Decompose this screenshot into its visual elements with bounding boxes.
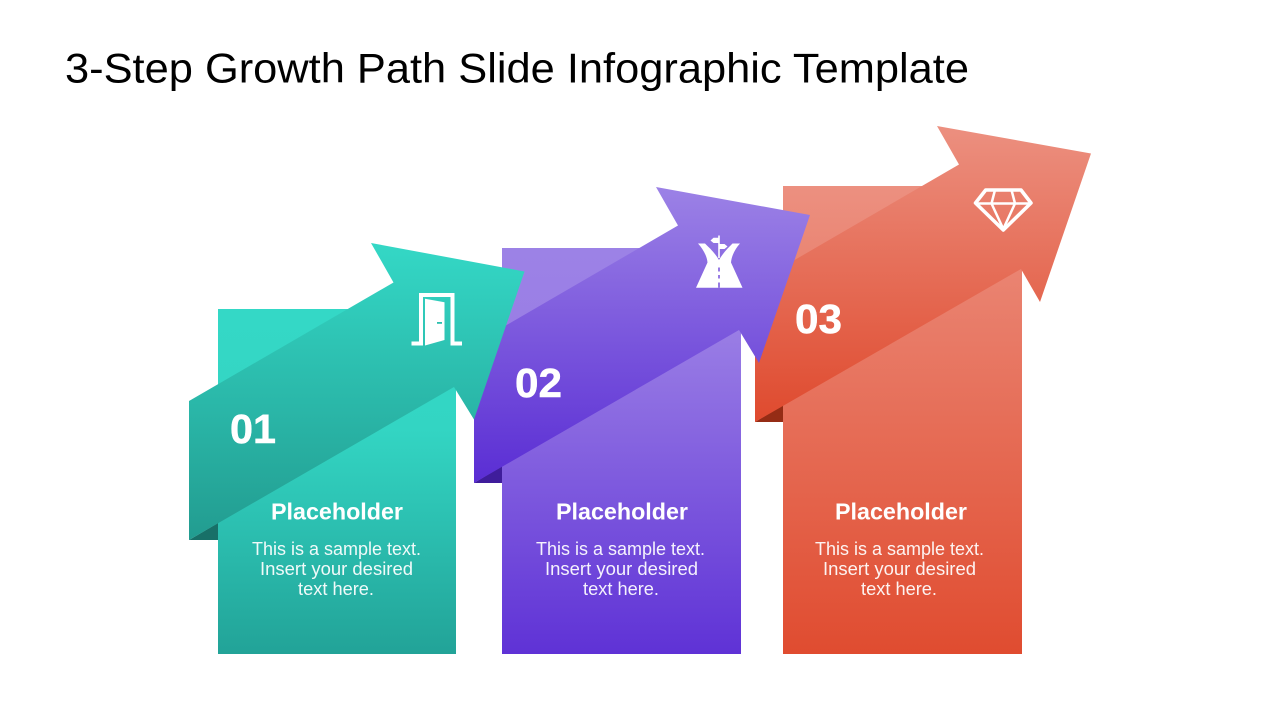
step 1 arrow fold shadow [189,523,218,540]
step 2 arrow [474,187,810,483]
step 1 body text [252,538,421,599]
step 3 body text: This is a sample text. [815,538,984,559]
step 3 column [783,186,1022,654]
step 1 arrow [189,243,524,540]
step 2 column [502,248,741,654]
step 2 body text: This is a sample text. [536,538,705,559]
step 1 body text: text here. [298,578,374,599]
step 3 body text [815,538,984,599]
step 1 body text: Insert your desired [260,558,413,579]
icon: diamond [976,190,1031,230]
step 2 heading: Placeholder [556,498,688,524]
step 2 number: 02 [515,360,562,406]
step 2 body text [536,538,705,599]
step 1 column [218,309,456,654]
step 3 panel [755,126,1091,654]
title: 3-Step Growth Path Slide Infographic Template [65,45,969,92]
step 1 body text: This is a sample text. [252,538,421,559]
step 2 arrow fold shadow [474,466,502,483]
step 1 number: 01 [230,406,276,452]
step 3 number: 03 [795,296,842,342]
step 1 heading: Placeholder [271,498,403,524]
icon: road with signpost [696,236,742,288]
step 2 body text: text here. [583,578,659,599]
step 2 panel [474,187,810,654]
step 2 body text: Insert your desired [545,558,698,579]
step 3 arrow fold shadow [755,405,783,422]
step 3 arrow [755,126,1091,422]
step 3 body text: text here. [861,578,937,599]
icon: door [412,293,462,346]
step 3 body text: Insert your desired [823,558,976,579]
step 1 panel [189,243,524,654]
step 3 heading: Placeholder [835,498,967,524]
